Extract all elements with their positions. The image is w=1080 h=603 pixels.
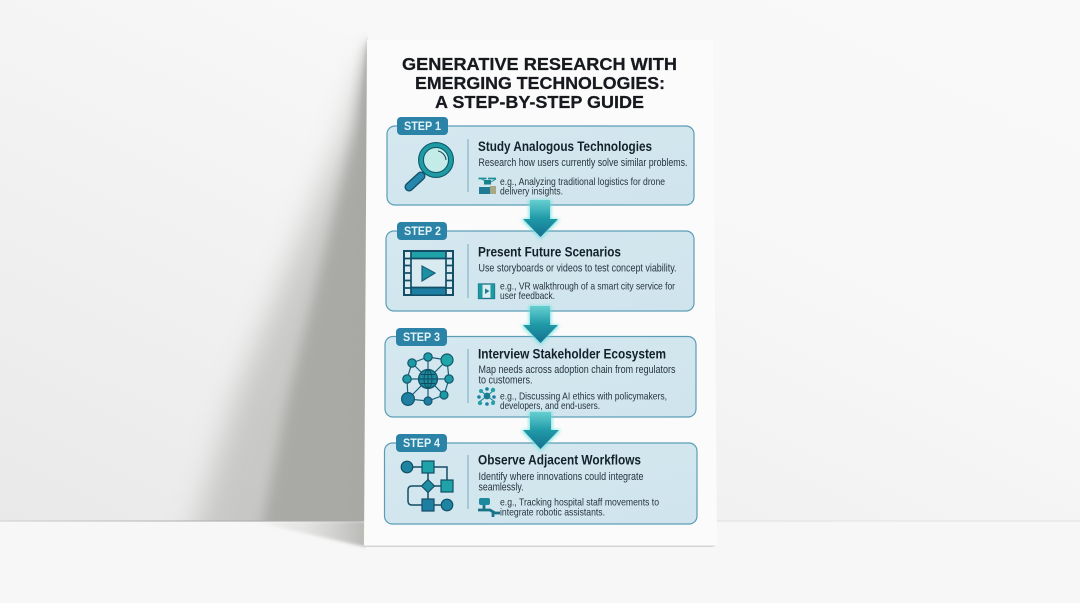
badge: step 3 [396, 328, 447, 346]
icon: robotic assistant [478, 498, 500, 517]
arrow: step 3 to step 4 [521, 412, 561, 451]
title: GENERATIVE RESEARCH WITH [402, 54, 677, 74]
title: A STEP-BY-STEP GUIDE [435, 92, 644, 112]
floor [0, 520, 1080, 603]
step 4 example: integrate robotic assistants. [500, 508, 605, 518]
step 3 description: to customers. [478, 374, 532, 386]
icon: magnifying glass [409, 145, 451, 187]
poster bottom edge [364, 546, 717, 547]
step 4 description: Identify where innovations could integrate [478, 471, 644, 483]
icon: stakeholder network [402, 353, 453, 405]
step 2 heading: Present Future Scenarios [478, 244, 621, 260]
badge: step 4: STEP 4 [403, 438, 441, 450]
poster shadow on wall [186, 38, 368, 521]
arrow: step 1 to step 2 [521, 200, 560, 239]
title [402, 54, 677, 112]
panel: step 3 [385, 328, 696, 417]
panel: step 4 [384, 434, 697, 524]
step 1 heading: Study Analogous Technologies [478, 139, 652, 154]
step 1 example: e.g., Analyzing traditional logistics for drone [500, 177, 665, 188]
step 1 description: Research how users currently solve similar problems. [478, 157, 688, 169]
panel: step 1 [387, 117, 694, 205]
badge: step 2 [397, 222, 447, 240]
badge: step 1 [397, 117, 448, 135]
icon: drone and parcel [478, 178, 496, 194]
step 4 heading: Observe Adjacent Workflows [478, 452, 641, 468]
step 2 example: user feedback. [500, 291, 555, 302]
step 3 example: developers, and end-users. [500, 401, 600, 412]
step 2 description: Use storyboards or videos to test concept viability. [478, 262, 676, 274]
badge: step 1: STEP 1 [404, 121, 442, 133]
step 3 heading: Interview Stakeholder Ecosystem [478, 346, 666, 362]
step 4 example: e.g., Tracking hospital staff movements to [500, 498, 659, 508]
badge: step 4 [396, 434, 447, 452]
title: EMERGING TECHNOLOGIES: [415, 73, 665, 93]
icon: small cluster [477, 387, 496, 406]
step 1 example: delivery insights. [500, 186, 563, 198]
badge: step 2: STEP 2 [404, 226, 441, 238]
step 2 example: e.g., VR walkthrough of a smart city service for [500, 282, 676, 292]
poster shadow on floor [275, 521, 366, 548]
step 3 description: Map needs across adoption chain from regulators [478, 364, 676, 376]
badge: step 3: STEP 3 [403, 332, 440, 344]
panel: step 2 [386, 222, 694, 311]
step 3 example: e.g., Discussing AI ethics with policymakers, [500, 392, 667, 402]
icon: film strip with play button [404, 251, 453, 295]
poster sheet [364, 40, 717, 546]
step 4 description: seamlessly. [478, 482, 524, 494]
icon: small film frame [478, 284, 494, 298]
icon: workflow diagram [401, 461, 453, 511]
arrow: step 2 to step 3 [521, 306, 560, 345]
